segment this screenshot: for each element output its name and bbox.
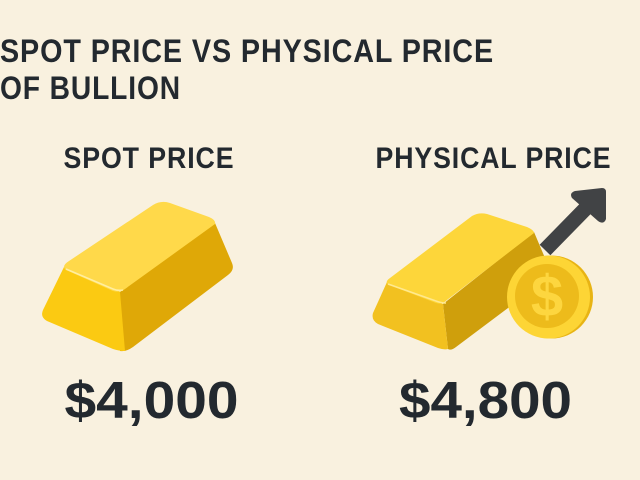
icon: spot gold bar [42, 202, 233, 351]
heading: physical price: PHYSICAL PRICE [376, 142, 612, 175]
icon: dollar coin: $ [531, 264, 563, 329]
heading: spot price: SPOT PRICE [64, 142, 234, 175]
title: OF BULLION [0, 70, 181, 106]
title [0, 33, 494, 106]
price: spot: $4,000 [64, 372, 239, 430]
price: physical: $4,800 [399, 372, 572, 430]
icon: physical gold bar [373, 213, 545, 350]
title: SPOT PRICE VS PHYSICAL PRICE [0, 33, 494, 69]
icon: up arrow [545, 188, 606, 250]
icon: dollar coin [507, 256, 593, 338]
